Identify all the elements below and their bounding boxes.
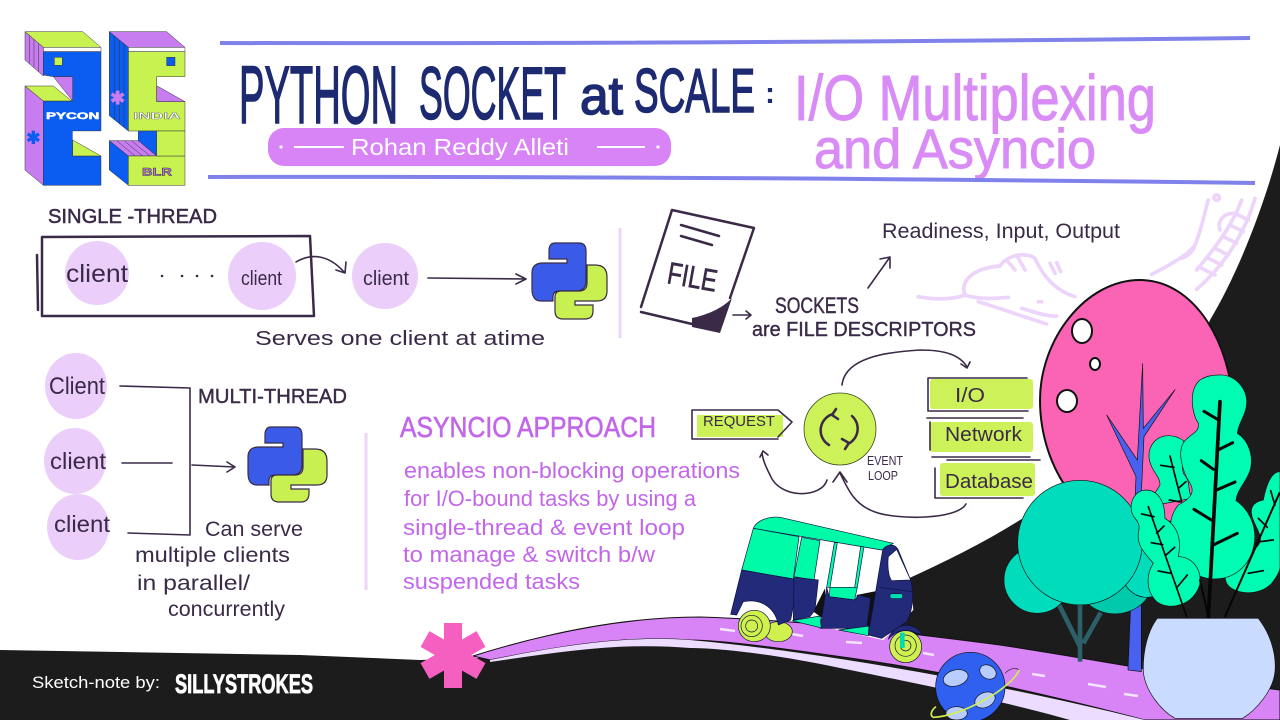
client one: Client [49,373,105,400]
body text: for I/O-bound tasks by using a [404,486,697,511]
road [473,617,1280,720]
client n: client [241,268,282,290]
credit name: SILLYSTROKES [175,669,313,699]
caption: concurrently [168,598,286,621]
icon: pink asterisk [425,623,481,688]
arrow [733,311,751,319]
panel: sockets are file descriptors [641,210,1120,341]
body text: single-thread & event loop [403,515,685,540]
sockets label: SOCKETS [775,293,859,318]
client one [65,241,129,305]
heading: SINGLE -THREAD [48,206,217,228]
client three: client [54,511,111,537]
pink tree [1040,280,1233,530]
caption: Serves one client at atime [255,328,545,350]
body text: suspended tasks [403,569,580,594]
leaves [1131,375,1280,606]
body [731,517,913,640]
body text [403,458,740,594]
vase [1143,618,1275,718]
title: Python Socket at Scale [239,50,755,141]
icon: file document [641,210,754,333]
database box [932,457,1040,498]
network box: Network [945,424,1023,446]
divider [364,433,368,590]
readiness label: Readiness, Input, Output [882,220,1120,243]
tree trunk: blue [1107,363,1175,672]
planet [931,652,1019,720]
event loop label: EVENT [867,453,903,468]
bottom rule [208,177,1255,183]
title: Python Socket at Scale: SOCKET [419,52,566,135]
title colon: : [765,77,775,110]
leaf veins [1142,402,1279,618]
request box: REQUEST [703,413,775,430]
logo: PyCon India 25 BLR [25,32,185,185]
database box: Database [945,471,1033,493]
serving client [352,243,418,309]
icon: python logo [248,427,327,502]
io box [928,378,1033,411]
arrow back to request [760,451,827,494]
body text: to manage & switch b/w [403,542,655,567]
request box [692,410,792,439]
serving client: client [363,268,409,290]
diagram: event loop [692,350,1040,517]
client n [228,242,296,310]
title: IO Multiplexing: I/O Multiplexing [794,62,1156,134]
title: Python Socket at Scale: SCALE [634,57,755,126]
event loop label [867,453,903,483]
title block [208,38,1255,183]
credit label: Sketch-note by: [32,673,160,692]
arrow to resources [842,350,970,385]
arrow to serving client [296,257,346,273]
logo: PyCon India 25 BLR: PYCON [46,111,99,121]
io box: I/O [955,385,985,407]
icon: python logo [532,243,607,319]
divider [618,228,622,338]
client box [37,236,314,316]
top rule [220,38,1250,43]
client three [47,494,111,560]
panel: multi-thread [44,353,347,621]
panel: asyncio approach [400,412,740,594]
dots [162,275,212,277]
network box [927,418,1033,452]
heading: MULTI-THREAD [198,386,347,408]
wheel: front [888,625,923,663]
auto rickshaw [731,517,923,663]
speaker pill: Rohan Reddy Alleti [351,134,569,160]
logo: PyCon India 25 BLR: INDIA [133,111,182,121]
teal tree [1004,480,1171,662]
caption: Can serve [205,518,303,541]
arrow from resources [833,472,966,517]
title: Python Socket at Scale: PYTHON [239,50,398,141]
wheel: rear [738,610,770,642]
title: Python Socket at Scale: at [580,66,623,126]
wheel: rear inner [764,622,792,642]
speaker pill [268,128,671,166]
black background landscape [0,145,1280,720]
client one [45,353,107,419]
heading: ASYNCIO APPROACH [400,412,656,444]
panel: single-thread [37,206,607,350]
footer credit [32,669,313,699]
connector lines [120,386,235,535]
arrow to python [428,274,526,284]
faint sketch: mouse and ladder [918,195,1255,324]
client two: client [50,448,107,474]
icon: file document: FILE [665,255,720,299]
arrow up [868,257,890,288]
client one: client [66,260,128,288]
caption: in parallel/ [137,572,250,595]
caption: multiple clients [135,544,290,567]
logo: PyCon India 25 BLR: BLR [142,166,172,178]
caption [135,518,303,621]
event loop label: LOOP [868,468,898,483]
file descriptors label: are FILE DESCRIPTORS [752,319,976,341]
client two [44,428,107,494]
body text: enables non-blocking operations [404,458,740,483]
title: and Asyncio: and Asyncio [814,117,1096,180]
event loop circle [804,393,876,465]
plant with leaves in vase [1131,375,1280,718]
